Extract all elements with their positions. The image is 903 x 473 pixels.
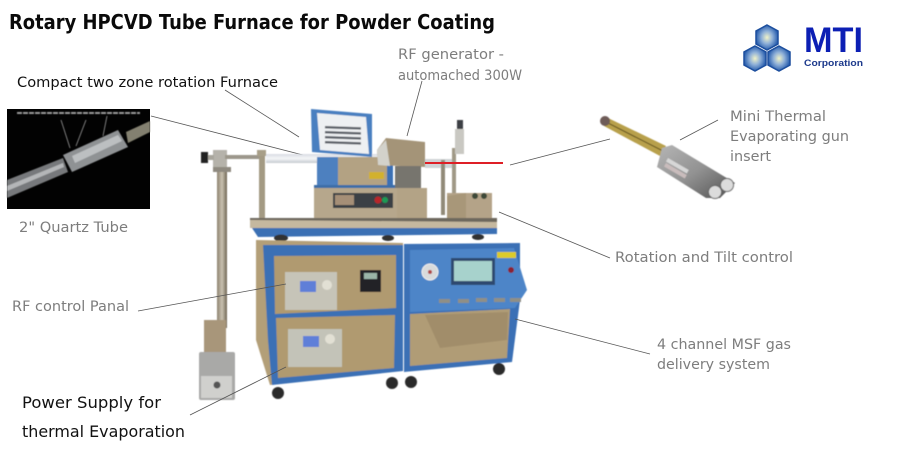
RF generator box <box>377 138 427 218</box>
label: Compact two zone rotation Furnace: Compact two zone rotation Furnace <box>17 75 278 91</box>
opened furnace lid <box>311 109 372 157</box>
machine photo <box>199 109 527 400</box>
leader line: gas delivery <box>515 319 650 354</box>
leader line: furnace label <box>225 90 299 137</box>
logo: MTI Corporation: Corporation <box>804 58 863 68</box>
label: Rotation and Tilt control: Rotation and Tilt control <box>615 250 793 266</box>
label: 4 channel MSF gas delivery system: delivery system <box>657 357 770 373</box>
furnace control box <box>314 188 397 218</box>
label: 4 channel MSF gas delivery system: 4 channel MSF gas <box>657 337 791 353</box>
label: RF generator: automached 300W <box>398 68 522 84</box>
logo: MTI Corporation <box>744 21 863 71</box>
label: RF control Panal: RF control Panal <box>12 299 129 315</box>
red laser line <box>425 162 503 164</box>
leader line: thermal gun left <box>510 139 610 165</box>
label: 4 channel MSF gas delivery system <box>657 337 791 373</box>
title: Rotary HPCVD Tube Furnace for Powder Coating <box>9 10 495 34</box>
left cabinet <box>256 240 403 385</box>
logo: MTI Corporation: MTI <box>804 21 863 60</box>
leader line: RF control panel <box>138 284 286 311</box>
quartz process tube <box>266 154 386 163</box>
leader line: rotation and tilt <box>499 212 610 258</box>
leader line: RF generator <box>407 81 422 136</box>
label: Power Supply for thermal Evaporation: Power Supply for <box>22 393 161 412</box>
leader line: thermal gun right <box>680 120 718 140</box>
label: Mini Thermal Evaporating gun insert: Mini Thermal <box>730 109 826 125</box>
icon: mini thermal evaporating gun <box>600 116 735 198</box>
vacuum pipe and pump <box>199 150 266 400</box>
label: RF generator <box>398 47 522 84</box>
label: Power Supply for thermal Evaporation <box>22 393 185 441</box>
label: Power Supply for thermal Evaporation: thermal Evaporation <box>22 422 185 441</box>
leader line: power supply <box>190 367 286 415</box>
cabinet casters <box>272 363 505 399</box>
leader line: quartz tube <box>151 116 303 155</box>
label: Mini Thermal Evaporating gun insert: Evaporating gun <box>730 129 849 145</box>
furnace body <box>314 157 396 188</box>
caption: 2 inch Quartz Tube: 2" Quartz Tube <box>19 220 128 236</box>
right cabinet <box>404 243 527 372</box>
top table <box>250 218 497 242</box>
label: RF generator: RF generator - <box>398 47 504 63</box>
label: Mini Thermal Evaporating gun insert: insert <box>730 149 772 165</box>
photo: 2 inch quartz tube <box>7 109 150 209</box>
stand and tilt control <box>441 120 492 221</box>
label: Mini Thermal Evaporating gun insert <box>730 109 849 165</box>
